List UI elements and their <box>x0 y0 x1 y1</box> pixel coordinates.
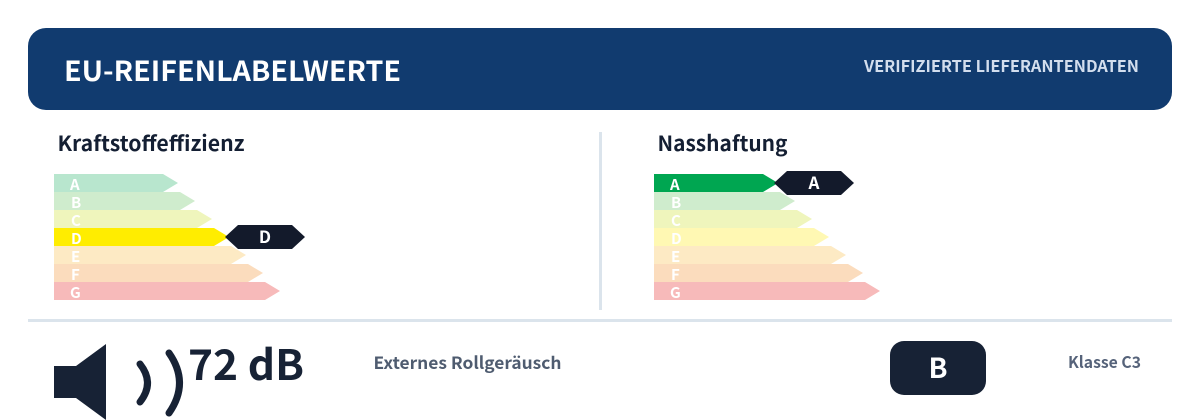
rating scale: fuel efficiency <box>54 174 280 303</box>
rating scale: wet grip: C <box>671 210 681 231</box>
horizontal divider <box>28 319 1172 322</box>
rating scale: wet grip: G <box>670 282 681 303</box>
header band <box>28 28 1172 110</box>
title: EU-REIFENLABELWERTE <box>64 50 401 90</box>
rating scale: fuel efficiency: B <box>71 192 81 213</box>
tyre class: Klasse C3 <box>1068 349 1141 373</box>
heading: fuel efficiency: Kraftstoffeffizienz <box>58 128 245 158</box>
rating marker: A <box>774 169 854 195</box>
rating marker: D <box>225 223 305 249</box>
noise class badge <box>890 341 986 395</box>
noise value: 72 dB <box>188 332 304 393</box>
header note: VERIFIZIERTE LIEFERANTENDATEN <box>863 53 1139 77</box>
rating scale: wet grip <box>654 174 880 303</box>
rating scale: wet grip: D <box>671 228 682 249</box>
rating scale: fuel efficiency: A <box>69 174 80 195</box>
divider between panels <box>599 132 602 310</box>
rating marker: D: D <box>259 223 271 248</box>
rating scale: fuel efficiency: E <box>71 246 80 267</box>
rating scale: fuel efficiency: C <box>71 210 81 231</box>
rating scale: fuel efficiency: D <box>71 228 82 249</box>
panel: fuel efficiency <box>54 128 305 303</box>
rating scale: fuel efficiency: G <box>70 282 81 303</box>
noise label: Externes Rollgeräusch <box>374 349 562 374</box>
icon: speaker with sound waves <box>54 344 180 420</box>
rating scale: wet grip: B <box>671 192 681 213</box>
rating scale: wet grip: E <box>671 246 680 267</box>
panel: wet grip <box>654 128 880 303</box>
rating scale: wet grip: F <box>671 264 680 285</box>
rating scale: fuel efficiency: F <box>71 264 80 285</box>
rating scale: wet grip: A <box>669 174 680 195</box>
heading: wet grip: Nasshaftung <box>658 128 788 158</box>
rating marker: A: A <box>808 169 820 194</box>
noise class badge: B <box>928 347 948 387</box>
